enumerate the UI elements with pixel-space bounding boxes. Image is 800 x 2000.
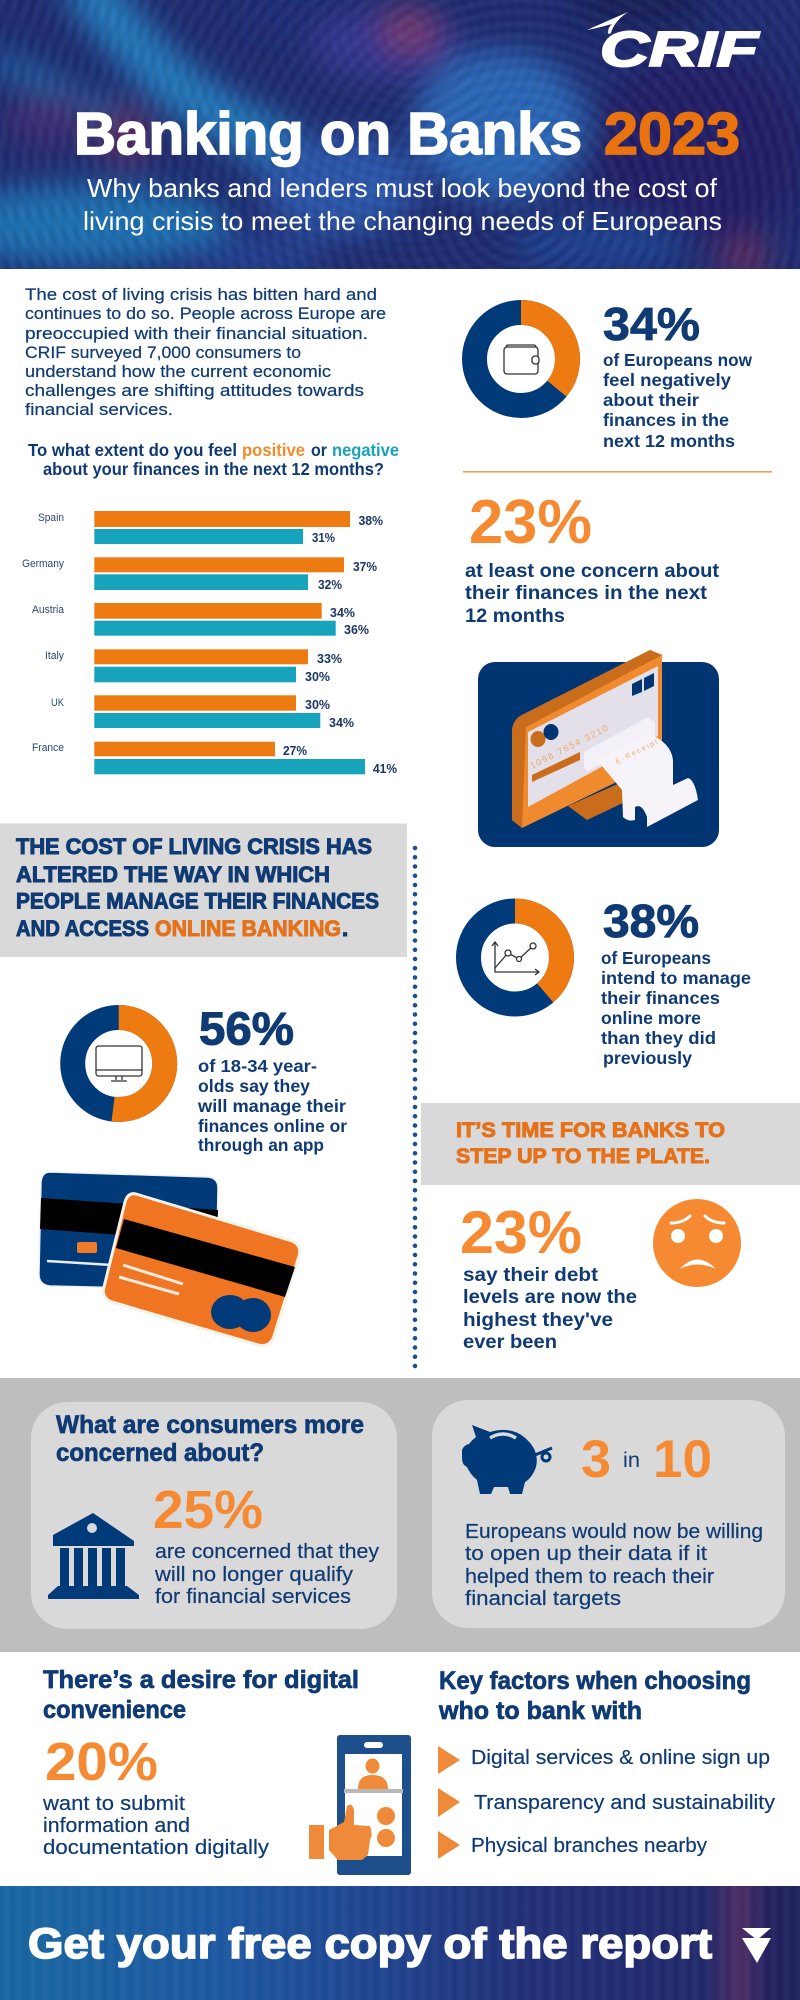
heading band: cost of living crisis xyxy=(0,824,407,957)
stat description: of 18-34 year- xyxy=(198,1056,317,1076)
intro text block: financial services. xyxy=(25,400,173,419)
row: Spain: 38% xyxy=(358,513,383,528)
stat description: ever been xyxy=(463,1331,557,1353)
title: Banking on Banks xyxy=(74,101,582,167)
stat description: of Europeans xyxy=(601,948,711,968)
stat description: feel negatively xyxy=(603,370,731,390)
donut stat: 34% xyxy=(474,298,752,451)
stat description xyxy=(197,1056,347,1155)
stat description: helped them to reach their xyxy=(465,1566,714,1588)
card screen xyxy=(528,666,658,807)
row: Italy: 33% xyxy=(317,651,342,666)
orange card xyxy=(103,1194,300,1346)
navy card xyxy=(39,1172,218,1290)
row: Spain xyxy=(38,511,383,545)
stat description xyxy=(465,560,720,627)
stat description: financial targets xyxy=(465,1588,621,1610)
factor: transparency xyxy=(438,1788,775,1817)
row: Italy xyxy=(45,649,342,684)
heading band: banks step up: STEP UP TO THE PLATE. xyxy=(456,1144,710,1168)
row: UK: 30% xyxy=(305,697,330,712)
icon: line chart xyxy=(492,942,539,975)
row: Austria: Austria xyxy=(32,604,65,616)
monitor stand xyxy=(568,782,625,820)
intro text block xyxy=(25,285,386,419)
panel: open data xyxy=(432,1400,785,1628)
stat description: of Europeans now xyxy=(603,350,752,370)
footer background xyxy=(0,1886,800,2000)
row: France: France xyxy=(32,742,64,754)
donut stat: 38% xyxy=(468,895,751,1068)
row: UK: 34% xyxy=(329,715,354,730)
header swirl background xyxy=(0,0,800,278)
heading band: banks step up xyxy=(421,1103,800,1185)
donut chart 38% xyxy=(468,911,562,1004)
heading: Key factors when choosing xyxy=(439,1667,751,1695)
icon: down arrow xyxy=(742,1928,771,1963)
row: Germany xyxy=(22,557,377,592)
panel heading: concerned about? xyxy=(56,1439,264,1467)
stat description: previously xyxy=(603,1048,692,1068)
stat description: Europeans would now be willing xyxy=(465,1521,763,1543)
stat: 3 in 10: in xyxy=(623,1449,640,1472)
intro text block: continues to do so. People across Europe are xyxy=(25,304,386,323)
stat description: levels are now the xyxy=(463,1286,637,1308)
illustration: credit cards xyxy=(39,1172,300,1346)
grey section background xyxy=(0,1378,800,1652)
row: France: 41% xyxy=(373,761,397,776)
card logo circles xyxy=(530,731,546,747)
icon: piggy bank xyxy=(462,1425,552,1494)
paper receipt xyxy=(597,733,698,827)
heading band: cost of living crisis: THE COST OF LIVING CRISIS HAS xyxy=(16,834,372,859)
factor: physical branches xyxy=(438,1831,707,1859)
stat description: information and xyxy=(43,1815,190,1837)
row: Italy: 30% xyxy=(305,669,330,684)
row: Austria: 34% xyxy=(330,605,355,620)
illustration: credit card monitor with e-receipt xyxy=(478,650,719,847)
section: key factors xyxy=(438,1667,775,1859)
heading: There’s a desire for digital xyxy=(43,1666,359,1694)
card slot xyxy=(584,717,655,771)
heading: convenience xyxy=(43,1696,186,1724)
stat description xyxy=(154,1541,379,1608)
chart title: about your finances in the next 12 months? xyxy=(43,459,384,479)
heading xyxy=(438,1667,751,1725)
intro text block: preoccupied with their financial situation. xyxy=(25,324,368,343)
heading band: cost of living crisis: ALTERED THE WAY IN WHICH xyxy=(16,862,330,887)
donut chart 34% xyxy=(474,312,568,406)
row: UK xyxy=(51,695,354,730)
receipt label: E-Receipt xyxy=(615,739,659,766)
icon: wallet xyxy=(504,345,539,374)
stat description xyxy=(42,1793,269,1859)
factor: digital services: Digital services & online sign up xyxy=(471,1747,770,1769)
stat figure 34%: 34% xyxy=(603,298,700,350)
stat description: will manage their xyxy=(197,1096,346,1116)
stat description: intend to manage xyxy=(601,968,751,988)
stat description: online more xyxy=(601,1008,701,1028)
stat description: documentation digitally xyxy=(43,1837,269,1859)
subtitle: living crisis to meet the changing needs of Europeans xyxy=(83,206,722,236)
footer banner xyxy=(0,1886,800,2000)
stat: 23% debt xyxy=(460,1199,637,1353)
stat description: want to submit xyxy=(42,1793,185,1815)
stat: 23% concern xyxy=(465,488,720,627)
stat description: for financial services xyxy=(155,1586,351,1608)
card number: 1098 7654 3210 xyxy=(528,723,610,771)
stat description: to open up their data if it xyxy=(465,1543,707,1565)
row: Germany: Germany xyxy=(22,558,64,570)
donut chart 56% xyxy=(73,1018,165,1110)
stat: 23% debt: 23% xyxy=(460,1199,582,1266)
card chip xyxy=(632,673,654,696)
stat description: say their debt xyxy=(463,1264,599,1286)
stat description: highest they've xyxy=(463,1309,613,1331)
chart title: To what extent do you feel xyxy=(28,440,237,460)
intro text block: challenges are shifting attitudes towards xyxy=(25,381,364,400)
header banner xyxy=(0,0,800,278)
heading band: cost of living crisis: AND ACCESS xyxy=(16,916,149,941)
section: digital convenience xyxy=(42,1666,411,1875)
stat description xyxy=(603,350,752,451)
heading band: banks step up: IT’S TIME FOR BANKS TO xyxy=(456,1118,725,1142)
icon: phone with thumbs up xyxy=(309,1735,411,1875)
stat description: are concerned that they xyxy=(155,1541,379,1563)
row: Italy: Italy xyxy=(45,650,64,662)
stat: 23% concern: 23% xyxy=(469,488,592,557)
call to action: Get your free copy of the report xyxy=(28,1920,712,1968)
stat description: their finances xyxy=(601,988,720,1008)
row: Austria xyxy=(32,603,369,637)
stat description: about their xyxy=(603,390,699,410)
chart title: negative xyxy=(332,440,399,460)
stat: 3 in 10: 10 xyxy=(653,1430,712,1489)
row: Germany: 37% xyxy=(353,559,377,574)
CRIF logo: CRIF xyxy=(600,23,759,77)
intro text block: The cost of living crisis has bitten hard and xyxy=(25,285,377,304)
intro text block: CRIF surveyed 7,000 consumers to xyxy=(25,343,301,362)
stat description xyxy=(463,1264,637,1353)
stat description: at least one concern about xyxy=(465,560,720,582)
stat figure 25%: 25% xyxy=(153,1480,263,1540)
stat figure 20%: 20% xyxy=(45,1732,158,1792)
row: France: 27% xyxy=(283,743,307,758)
row: France xyxy=(32,742,397,776)
monitor frame xyxy=(512,650,662,828)
panel: consumer concerns xyxy=(31,1402,397,1629)
stat description: finances in the xyxy=(603,410,729,430)
panel heading: What are consumers more xyxy=(56,1411,364,1439)
factor: physical branches: Physical branches nearby xyxy=(471,1835,707,1857)
donut stat: 56% xyxy=(73,1002,347,1155)
factor: digital services xyxy=(438,1746,770,1774)
stat description: 12 months xyxy=(465,605,565,627)
stat description: next 12 months xyxy=(603,431,735,451)
subtitle: Why banks and lenders must look beyond the cost of xyxy=(87,173,718,203)
stat description: olds say they xyxy=(198,1076,310,1096)
stat description xyxy=(601,948,751,1068)
chart title: positive xyxy=(242,440,305,460)
stat figure 56%: 56% xyxy=(199,1002,294,1054)
icon: worried face xyxy=(653,1199,741,1287)
stat description: their finances in the next xyxy=(465,582,708,604)
panel heading xyxy=(56,1411,364,1467)
stat description: finances online or xyxy=(198,1116,347,1136)
stat description xyxy=(465,1521,763,1610)
CRIF logo xyxy=(587,12,759,77)
stat description: through an app xyxy=(198,1135,324,1155)
factor: transparency: Transparency and sustainability xyxy=(474,1792,775,1814)
row: Spain: 31% xyxy=(312,530,335,545)
row: Austria: 36% xyxy=(344,622,369,637)
heading band: cost of living crisis: . xyxy=(342,916,348,941)
chart title xyxy=(28,440,399,479)
intro text block: understand how the current economic xyxy=(25,362,332,381)
title: 2023 xyxy=(604,101,740,167)
icon: desktop monitor xyxy=(96,1046,142,1081)
logo swoosh xyxy=(587,12,628,34)
heading band: cost of living crisis: ONLINE BANKING xyxy=(155,916,341,941)
bar chart: positive vs negative by country xyxy=(22,440,399,776)
stat description: will no longer qualify xyxy=(154,1564,353,1586)
heading band: cost of living crisis: PEOPLE MANAGE THEIR FINANCES xyxy=(16,888,379,914)
heading: who to bank with xyxy=(438,1697,642,1725)
stat figure 38%: 38% xyxy=(603,895,699,947)
subtitle xyxy=(83,173,722,236)
row: UK: UK xyxy=(51,697,65,709)
stat description: than they did xyxy=(601,1028,716,1048)
row: Spain: Spain xyxy=(38,512,64,524)
stat: 3 in 10: 3 xyxy=(581,1430,611,1489)
stat: 3 in 10 xyxy=(581,1430,712,1489)
icon: bank building xyxy=(48,1513,139,1599)
row: Germany: 32% xyxy=(318,577,342,592)
heading xyxy=(43,1666,359,1724)
chart title: or xyxy=(311,440,327,460)
